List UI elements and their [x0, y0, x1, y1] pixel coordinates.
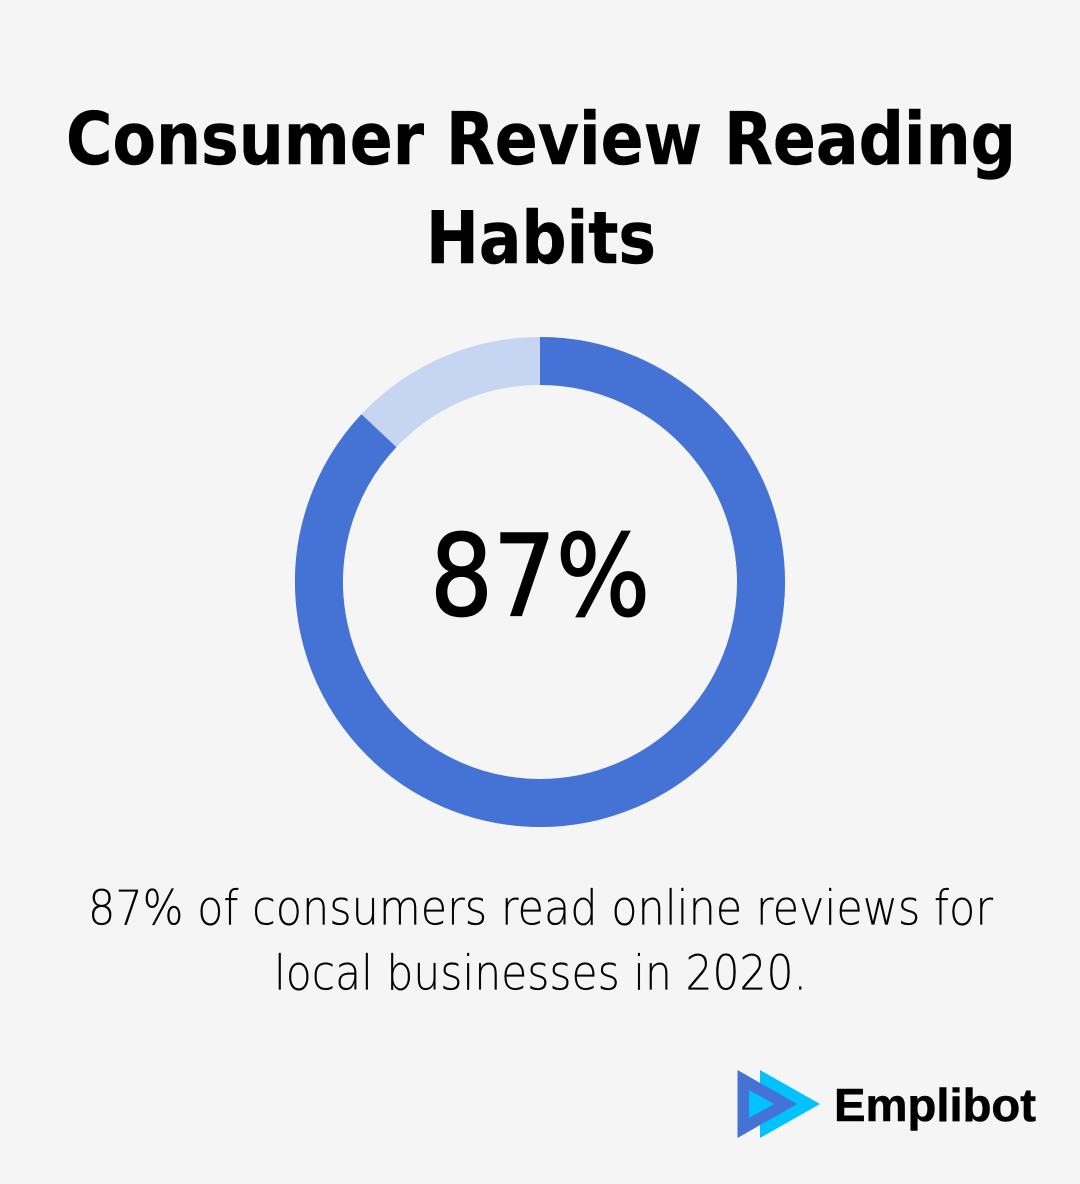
description text: local businesses in 2020. — [274, 946, 807, 1002]
logo wordmark: Emplibot — [834, 1079, 1036, 1131]
remaining segment — [319, 361, 761, 803]
logo: Emplibot — [738, 1070, 1036, 1138]
center value: 87% — [430, 512, 650, 642]
title: Habits — [426, 196, 656, 280]
description text — [88, 880, 993, 1002]
title — [66, 97, 1016, 280]
highlighted segment — [319, 361, 761, 803]
description text: 87% of consumers read online reviews for — [88, 880, 993, 936]
icon: play triangles — [738, 1070, 820, 1138]
donut chart: 87% — [319, 361, 761, 803]
